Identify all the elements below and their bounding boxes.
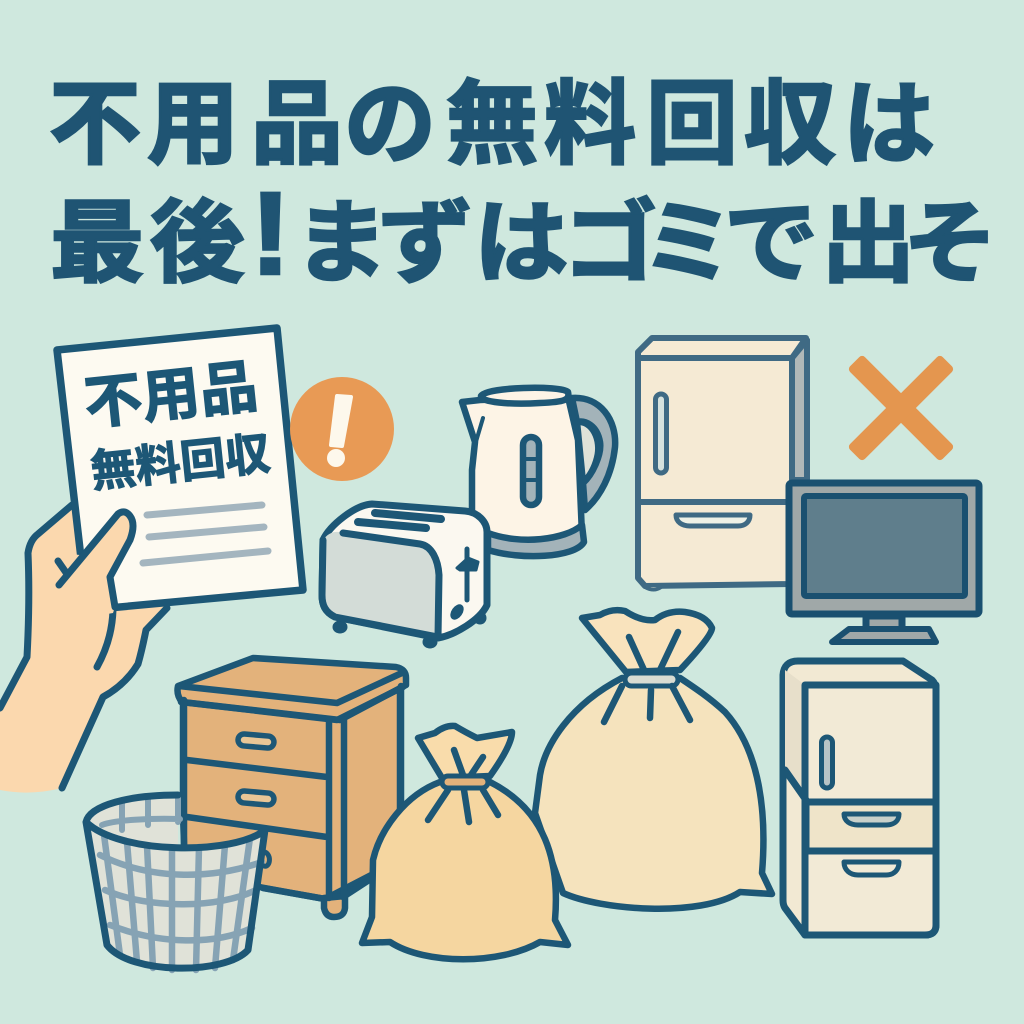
- refrigerator upper: [638, 338, 807, 590]
- refrigerator lower: [783, 661, 936, 935]
- title: 不用品の無料回収は: [49, 74, 935, 176]
- flyer text lines: [143, 505, 268, 563]
- thumb: [58, 512, 133, 622]
- title: 最後: [50, 192, 245, 294]
- flyer: [57, 328, 303, 610]
- hand holding flyer: [0, 503, 170, 793]
- television: [789, 483, 979, 642]
- cross mark: [847, 354, 955, 462]
- flyer heading: 無料回収: [88, 428, 273, 497]
- chest of drawers: [178, 658, 406, 917]
- warning icon: [290, 377, 394, 481]
- title: [49, 74, 997, 299]
- toaster: [322, 504, 487, 645]
- flyer heading: [81, 354, 273, 497]
- title: まずはゴミで出そ: [294, 192, 997, 294]
- large garbage bag: [535, 610, 772, 909]
- title: !: [250, 167, 291, 299]
- kettle: [462, 388, 615, 556]
- flyer heading: 不用品: [81, 354, 261, 437]
- waste basket: [86, 795, 269, 970]
- small garbage bag: [362, 726, 568, 959]
